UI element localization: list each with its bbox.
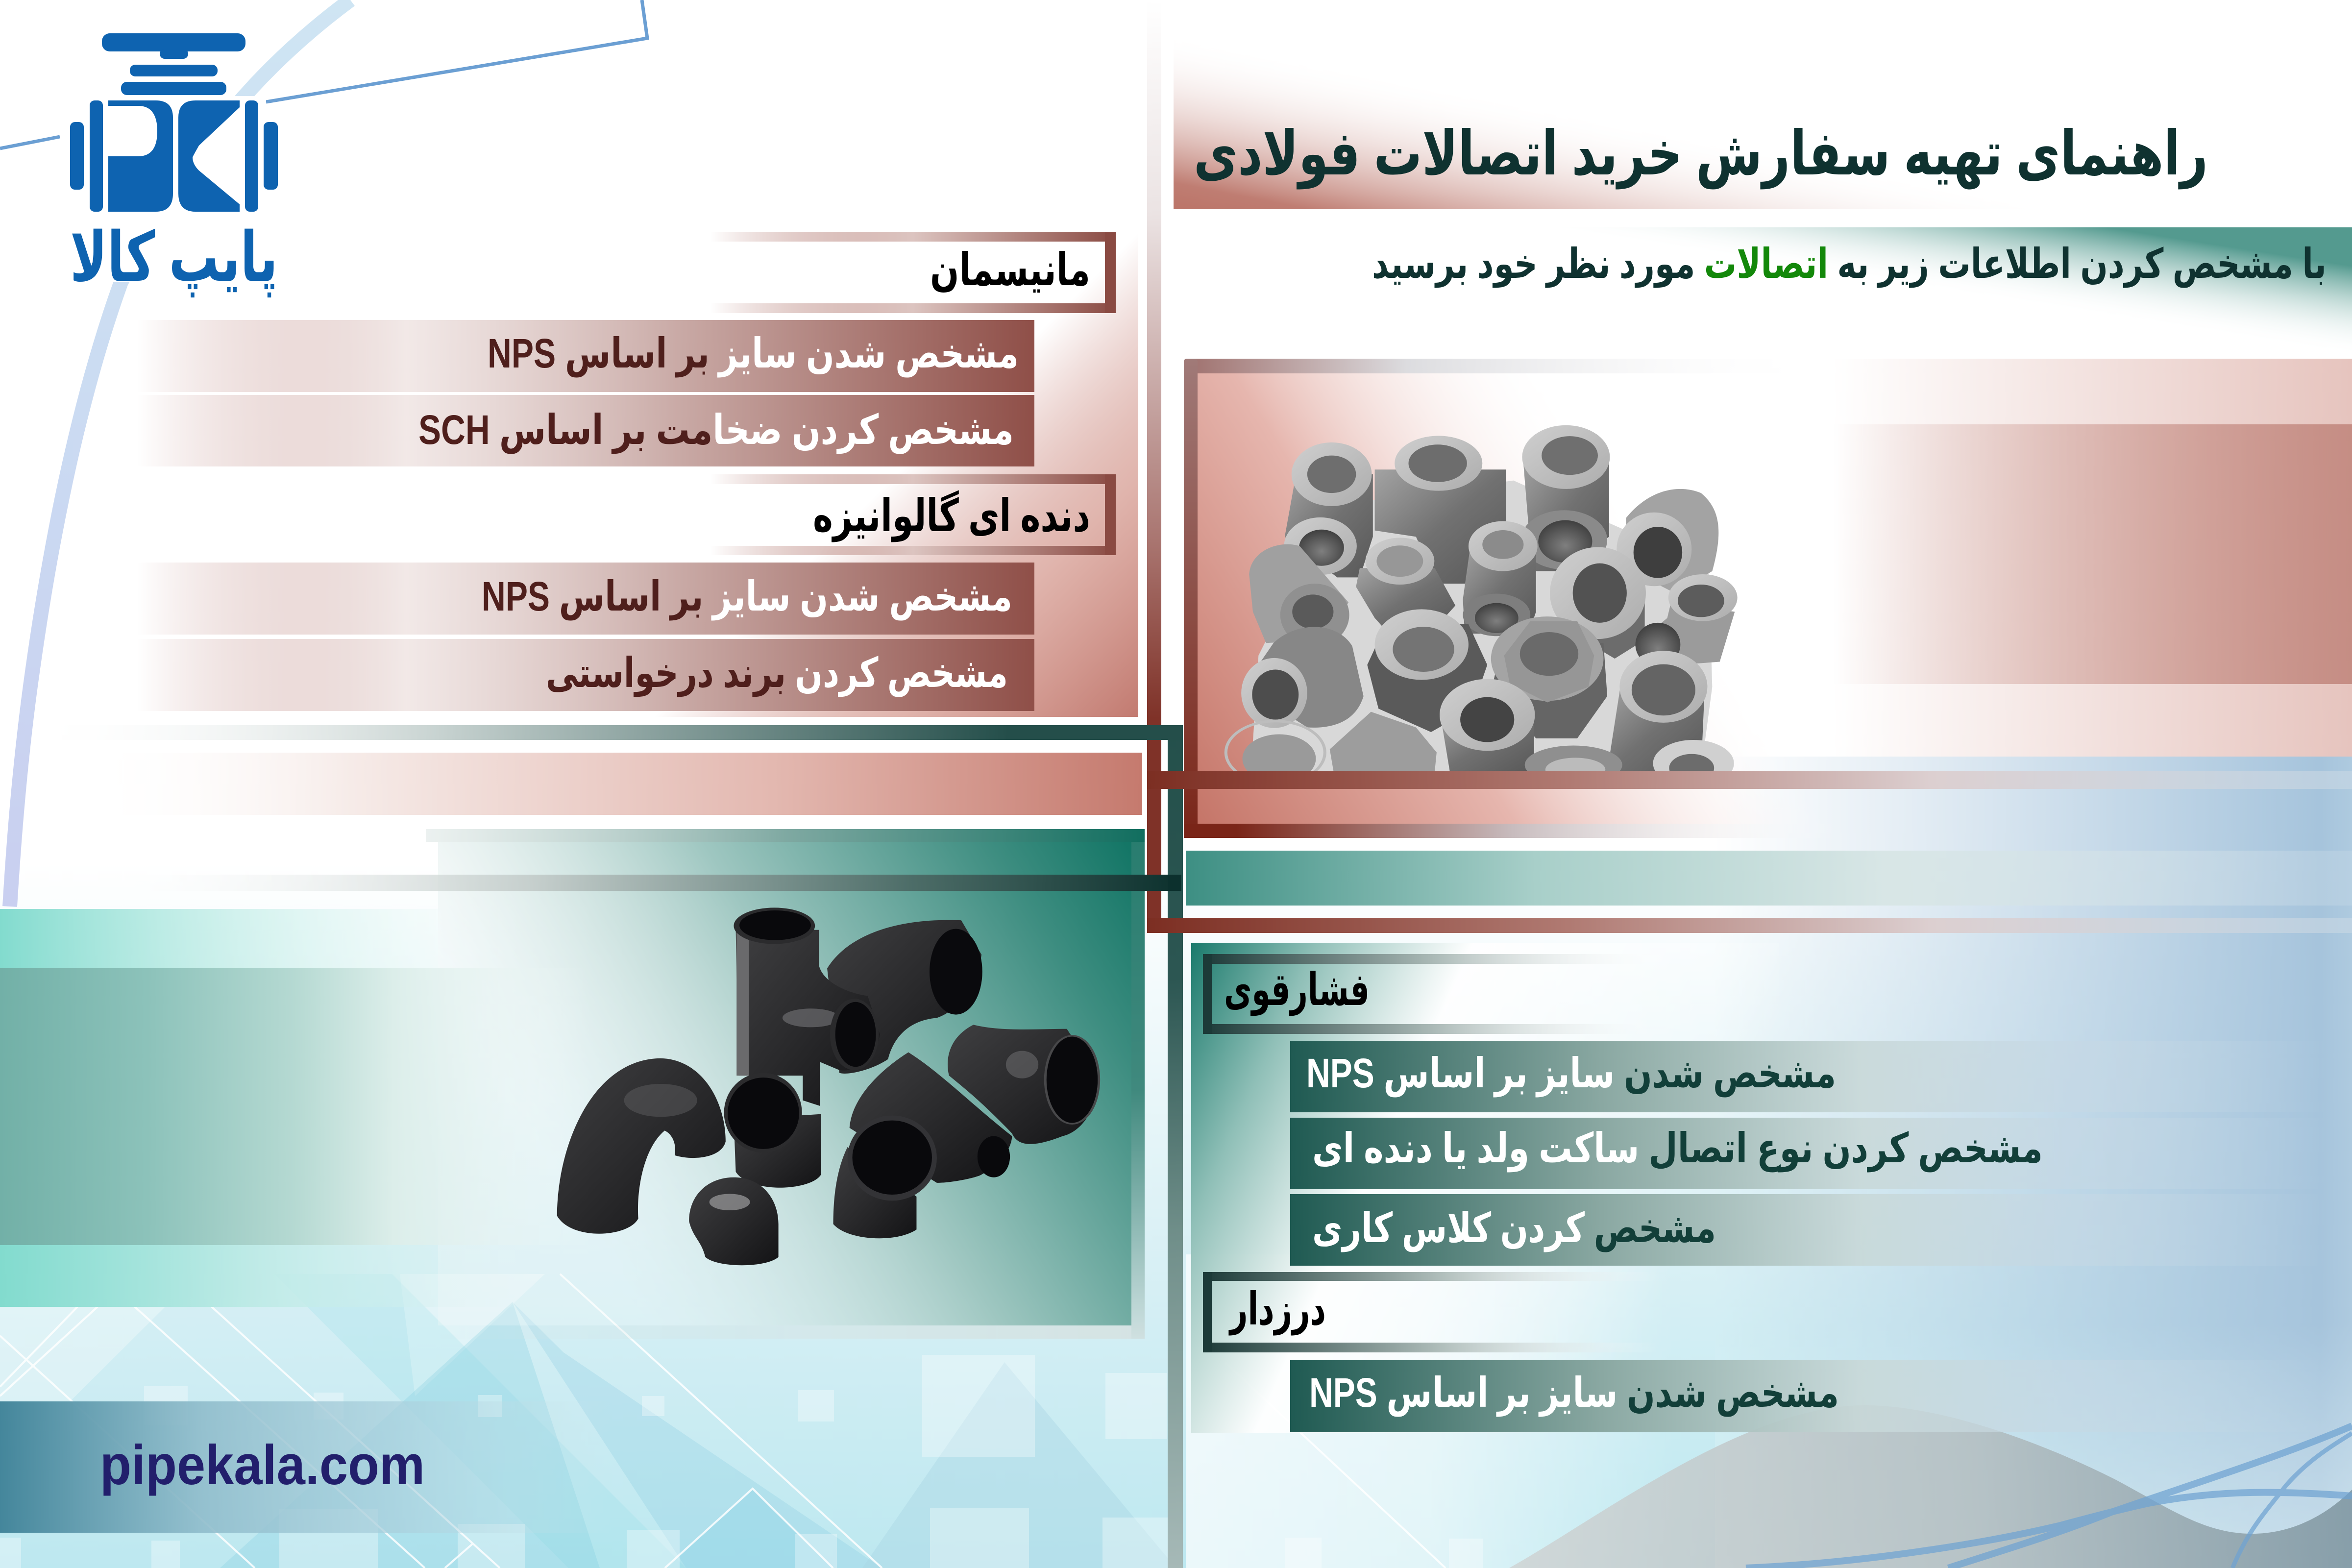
- elbow top right: [827, 920, 981, 1074]
- union right: [1493, 643, 1607, 738]
- bottom sockets: [1525, 745, 1622, 784]
- panel: pale pink side: [1833, 359, 2352, 757]
- band: teal: [1186, 851, 2352, 906]
- elbow left: [1249, 544, 1348, 643]
- row: NPS size: مشخص شدن سایز بر اساس NPS: [488, 330, 1019, 378]
- row: NPS size: [1290, 1041, 2328, 1112]
- band: right salmon: [1833, 424, 2352, 684]
- title band: [1174, 33, 2070, 209]
- divider bars: [29, 725, 1182, 815]
- tee back centre: [1375, 469, 1506, 584]
- hex nut bottom: [1330, 712, 1437, 771]
- elbow right: [1626, 489, 1718, 593]
- band: lower red: [1147, 918, 2352, 933]
- heading: high pressure: [1203, 954, 1659, 1034]
- row: NPS size: مشخص شدن سایز بر اساس NPS: [1306, 1050, 1836, 1098]
- nipple right: [1607, 687, 1705, 771]
- panel: left red list: [137, 232, 1138, 717]
- hill and curves: bottom right: [1509, 1405, 2352, 1568]
- row: NPS size: [137, 563, 1034, 635]
- U-bend: [557, 1058, 726, 1234]
- image: black steel fittings: [557, 907, 1100, 1265]
- heading: seamed: [1203, 1272, 1659, 1352]
- wordmark: پایپ کالا: [70, 219, 278, 298]
- row: NPS size: مشخص شدن سایز بر اساس NPS: [482, 573, 1012, 621]
- panel: right list: [1191, 943, 2328, 1433]
- heading: galvanized threaded: دنده ای گالوانیزه: [813, 490, 1090, 542]
- band: upper red: [1147, 771, 2352, 789]
- row: brand: مشخص کردن برند درخواستی: [546, 650, 1008, 697]
- heading: manesman: [710, 232, 1116, 313]
- heading: manesman: مانیسمان: [930, 245, 1090, 295]
- row: SCH thickness: مشخص کردن ضخامت بر اساس SCH: [418, 407, 1014, 454]
- cap: [689, 1177, 779, 1265]
- row: NPS size: مشخص شدن سایز بر اساس NPS: [1309, 1370, 1839, 1417]
- row: NPS size: [137, 320, 1034, 392]
- row: class: مشخص کردن کلاس کاری: [1312, 1205, 1716, 1252]
- heading: galvanized threaded: [710, 474, 1116, 555]
- ring bottom left: [1226, 721, 1325, 784]
- socket centre: [1441, 715, 1534, 771]
- small tee centre: [1463, 546, 1536, 634]
- row: brand: [137, 639, 1034, 711]
- tee: [736, 930, 880, 1106]
- logo: valve mark and wordmark: [70, 33, 278, 298]
- tee back right: [1523, 457, 1609, 571]
- reducer: [948, 1025, 1100, 1144]
- vertical strips: [1147, 0, 1183, 1568]
- panel: green photo block: [0, 829, 1181, 1339]
- website band: [0, 1401, 612, 1533]
- small tee centre left: [1356, 568, 1455, 631]
- row: class: [1290, 1194, 2328, 1266]
- elbow lower: [833, 1147, 916, 1238]
- large coupling: [1551, 590, 1645, 659]
- frame around fittings photo: [1184, 359, 1842, 838]
- website url: pipekala.com: [100, 1434, 425, 1496]
- elbow lower left: [1244, 627, 1364, 728]
- elbow center: [734, 1114, 821, 1188]
- row: socket weld or threaded: [1290, 1118, 2328, 1189]
- tee back left: [1285, 474, 1373, 577]
- image: grey forged fittings: [1226, 425, 1738, 787]
- elbow diagonal: [850, 1052, 1012, 1183]
- row: SCH thickness: [137, 395, 1034, 466]
- decorative blue arc and lines: [0, 0, 647, 906]
- heading: high pressure: فشارقوی: [1224, 965, 1370, 1016]
- row: NPS size: [1290, 1360, 2328, 1432]
- red horizontal bands and photo block: [1147, 359, 2352, 933]
- row: socket weld or threaded: مشخص کردن نوع اتصال ساکت ولد یا دنده ای: [1312, 1125, 2043, 1173]
- union left: [1367, 624, 1487, 732]
- heading: seamed: درزدار: [1228, 1284, 1326, 1335]
- subtitle band: [1534, 227, 2352, 356]
- tee far right: [1637, 602, 1735, 665]
